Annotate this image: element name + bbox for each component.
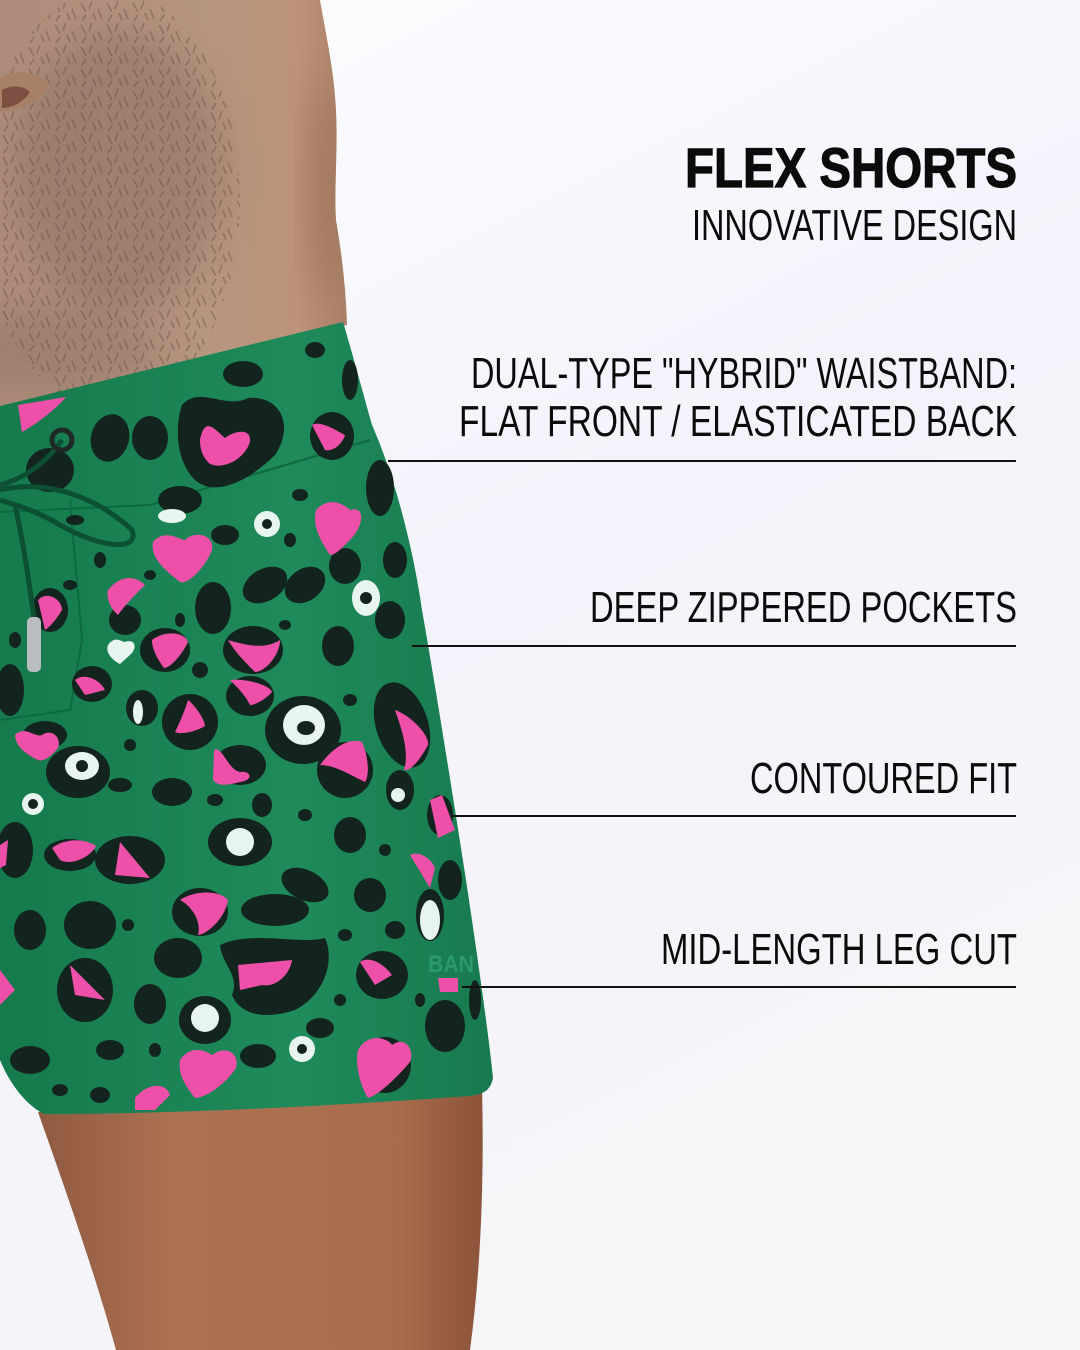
- model torso: [0, 0, 350, 410]
- small brand mark: BAN: [428, 951, 474, 978]
- drawstring: [0, 440, 133, 625]
- title block: [685, 136, 1017, 250]
- hair texture: [0, 0, 240, 410]
- fly seam: [0, 500, 82, 720]
- chest and belly hair shading: [15, 30, 225, 310]
- title: FLEX SHORTS: [685, 136, 1017, 199]
- spot centers: [28, 519, 372, 1054]
- navel: [0, 72, 50, 112]
- black leopard spots: [0, 342, 481, 1103]
- waistband edge: [0, 440, 370, 512]
- pink heart markings: [0, 397, 458, 1110]
- small scattered spots: [63, 580, 77, 590]
- eyelet: [52, 430, 72, 450]
- swim shorts: [0, 322, 493, 1114]
- model leg: [38, 1085, 483, 1350]
- feature: waistband: [388, 349, 1017, 461]
- cord tip: [27, 617, 41, 672]
- white spots: [22, 509, 440, 1062]
